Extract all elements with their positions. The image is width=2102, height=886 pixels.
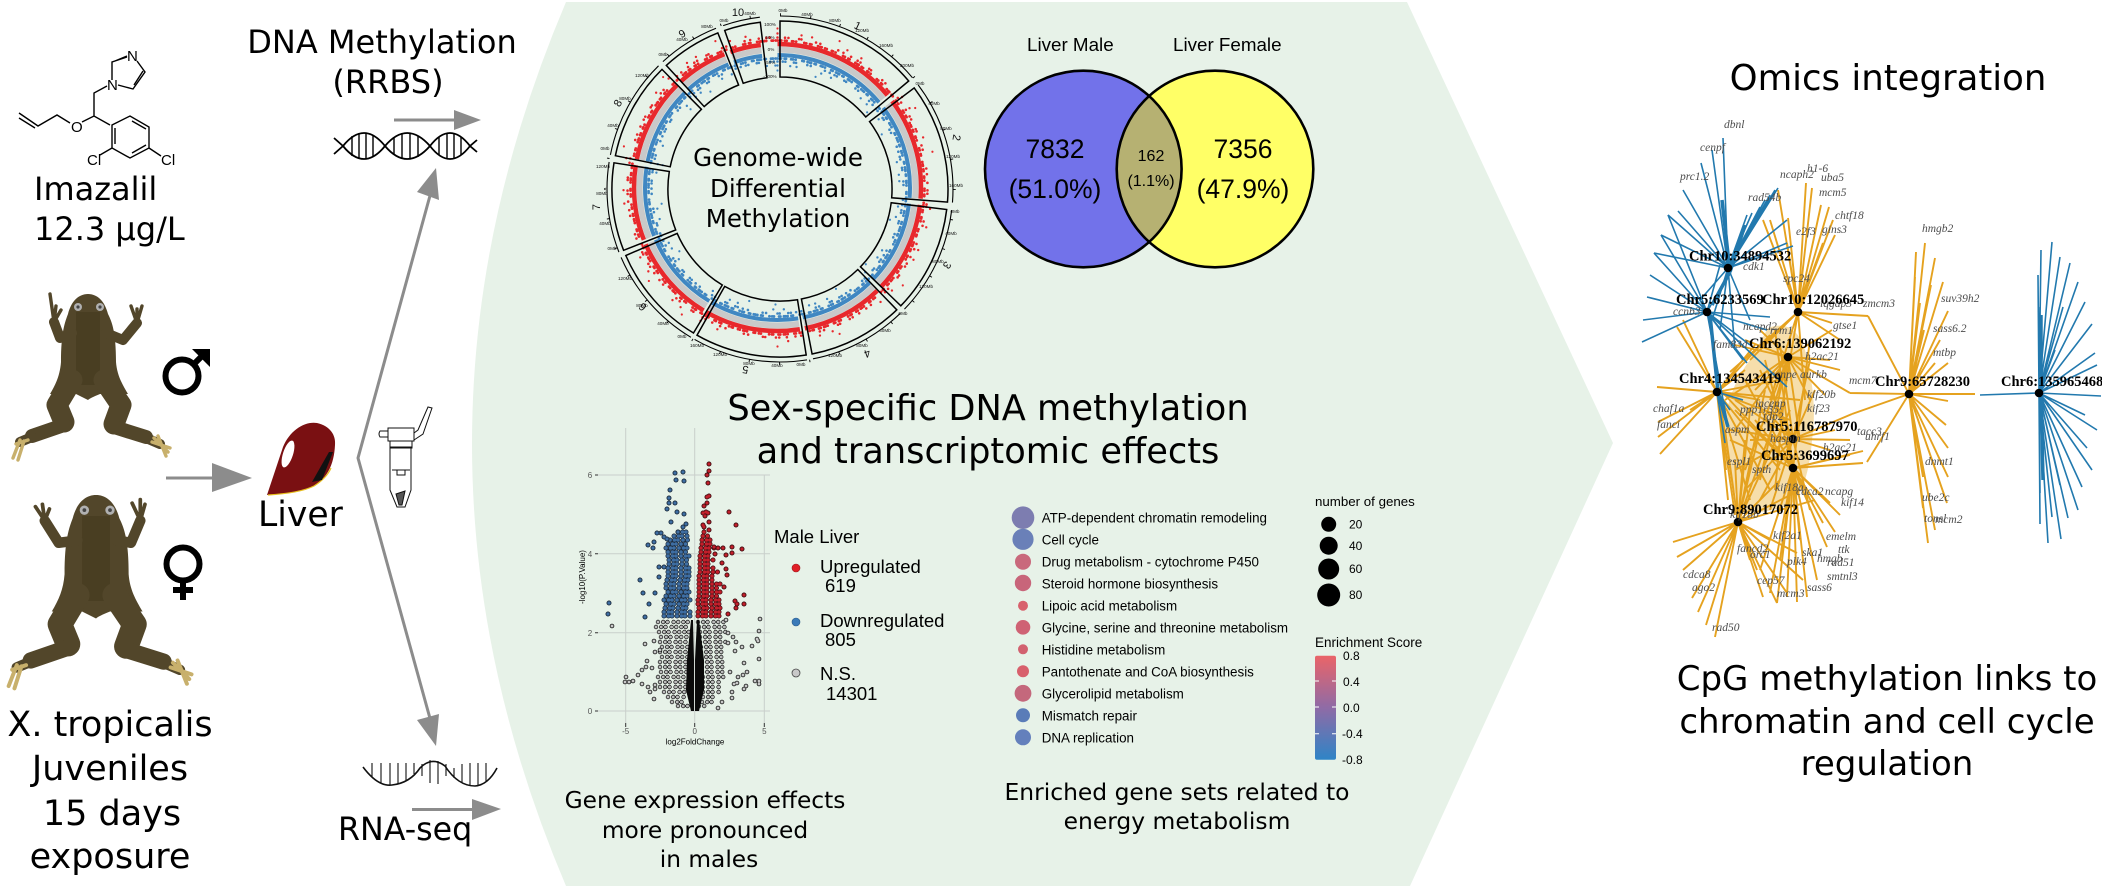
chart: CpG gene network: hmgb [1817, 553, 1843, 565]
chart: CpG gene network: Chr10:34894532 [1689, 249, 1791, 265]
text: RNA-seq label: RNA-seq [338, 812, 472, 848]
chart: circular genome-wide methylation plot: 5 [741, 363, 750, 375]
chart: CpG gene network: kif23 [1807, 403, 1830, 415]
chart: CpG gene network: cenpe [1770, 369, 1797, 381]
arrow: branching from liver to methylation and RNA-seq [358, 168, 439, 746]
chart: CpG gene network: haspin [1770, 433, 1801, 445]
chart: CpG gene network: Chr5:6233569 [1676, 292, 1764, 308]
icon: liver [267, 423, 335, 495]
chart: volcano plot male liver: 4 [588, 550, 593, 559]
legend: volcano plot: Downregulated [820, 610, 944, 631]
chart: circular genome-wide methylation plot: 10 [732, 7, 744, 19]
text: circular plot centre label: Genome-wide [693, 143, 863, 172]
chart: circular genome-wide methylation plot: 80Mb [596, 191, 608, 196]
chart: circular genome-wide methylation plot: 1 [852, 20, 863, 33]
chart: volcano plot male liver: 6 [588, 471, 593, 480]
chart: circular genome-wide methylation plot: 120Mb [919, 284, 933, 289]
icon: female symbol [166, 548, 200, 600]
chart: circular genome-wide methylation plot: 6 [637, 300, 649, 313]
chart: volcano plot male liver: 5 [762, 727, 767, 736]
legend: number of genes [1315, 494, 1415, 606]
icon: imazalil chemical structure: N [127, 48, 138, 65]
chart: circular genome-wide methylation plot: 120Mb [713, 352, 727, 357]
text: imazalil dose: 12.3 µg/L [34, 210, 185, 248]
icon: DNA double helix [334, 133, 477, 159]
legend: volcano plot: 14301 [826, 683, 877, 704]
chart: CpG gene network: h1-6 [1807, 163, 1828, 175]
icon: RNA strand [363, 760, 497, 786]
chart: CpG gene network: fam83d [1713, 339, 1748, 351]
chart: gene set enrichment bubble list: Glycine, serine and threonine metabolism [1042, 620, 1288, 636]
chart: CpG gene network: emelm [1826, 531, 1856, 543]
chart: gene set enrichment bubble list [1012, 506, 1288, 746]
chart: CpG gene network: sass6 [1807, 582, 1832, 594]
legend: enrichment score colour bar: -0.8 [1342, 753, 1363, 767]
chart: circular genome-wide methylation plot: 160Mb [879, 43, 893, 48]
chart: CpG gene network: cdca2 [1796, 486, 1824, 498]
chart: CpG gene network: gtse1 [1833, 320, 1857, 332]
chart: CpG gene network: Chr10:12026645 [1762, 292, 1864, 308]
chart: CpG gene network: cenpf [1700, 142, 1727, 154]
chart: circular genome-wide methylation plot: 9 [677, 28, 688, 41]
text: gene expression caption: Gene expression effects [565, 787, 845, 814]
chart: circular genome-wide methylation plot: 120Mb [635, 73, 649, 78]
chart: circular genome-wide methylation plot: 0Mb [608, 246, 617, 251]
text: gene expression caption: in males [660, 846, 758, 873]
chart: circular genome-wide methylation plot: 80Mb [856, 343, 868, 348]
chart: circular genome-wide methylation plot: 2 [950, 133, 962, 142]
text: liver label: Liver [258, 495, 344, 535]
chart: CpG gene network: ppp1r35 [1739, 404, 1779, 416]
chart: circular genome-wide methylation plot: 50% [765, 35, 775, 40]
heading: omics integration: Omics integration [1730, 58, 2046, 99]
chart: CpG gene network: rad51 [1827, 557, 1854, 569]
chart: gene set enrichment bubble list: Lipoic acid metabolism [1042, 598, 1177, 614]
chart: circular genome-wide methylation plot: 40Mb [771, 363, 783, 368]
chart: circular genome-wide methylation plot: 200Mb [900, 63, 914, 68]
icon: imazalil chemical structure: N [107, 77, 118, 94]
chart: CpG gene network: kif14 [1841, 497, 1864, 509]
chart: CpG gene network: kif18a [1775, 482, 1804, 494]
chart: Venn diagram male vs female [985, 34, 1313, 267]
legend: enrichment score colour bar: 0.8 [1343, 649, 1360, 663]
chart: circular genome-wide methylation plot: 7 [591, 204, 603, 210]
chart: CpG gene network: gins3 [1822, 224, 1847, 236]
chart: circular genome-wide methylation plot: 120Mb [618, 276, 632, 281]
chart: circular genome-wide methylation plot: 80Mb [932, 259, 944, 264]
chart: gene set enrichment bubble list: Steroid hormone biosynthesis [1042, 576, 1218, 592]
chart: CpG gene network: spc24 [1783, 273, 1810, 285]
chart: CpG gene network: ttk [1838, 544, 1850, 556]
legend: number of genes: number of genes [1315, 494, 1415, 509]
chart: CpG gene network: aurkb [1800, 369, 1827, 381]
text: imazalil dose: Imazalil [34, 170, 157, 208]
chart: Venn diagram male vs female: (1.1%) [1127, 173, 1175, 190]
chart: CpG gene network: Chr5:116787970 [1756, 419, 1858, 435]
legend: volcano plot: Male Liver [774, 526, 859, 547]
chart: CpG gene network: Chr5:3699697 [1761, 448, 1849, 464]
chart: CpG gene network: dnmt1 [1925, 456, 1954, 468]
chart: circular genome-wide methylation plot: 40Mb [676, 37, 688, 42]
icon: male frog [13, 294, 170, 460]
text: gene expression caption: more pronounced [602, 817, 808, 844]
chart: CpG gene network: Chr9:65728230 [1875, 374, 1970, 390]
chart: volcano plot male liver: 0 [588, 707, 593, 716]
chart: circular genome-wide methylation plot: 8 [612, 98, 625, 109]
chart: CpG gene network: prc1.2 [1679, 171, 1710, 183]
chart: Venn diagram male vs female: Liver Female [1173, 34, 1282, 55]
legend: enrichment score colour bar: 0.0 [1343, 701, 1360, 715]
chart: CpG gene network: h2ac21 [1805, 351, 1839, 363]
icon: imazalil chemical structure: Cl [161, 152, 175, 169]
legend: enrichment score colour bar [1315, 635, 1422, 767]
chart: circular genome-wide methylation plot: 0Mb [916, 81, 925, 86]
icon: female frog [9, 495, 192, 688]
chart: circular genome-wide methylation plot: 80Mb [701, 24, 713, 29]
chart: CpG gene network: Chr4:134543419 [1679, 371, 1781, 387]
icon: male symbol [166, 349, 210, 392]
icon: imazalil chemical structure [19, 48, 175, 169]
panel: central results arrow [472, 2, 1613, 886]
chart: volcano plot male liver: -log10(P.Value) [578, 550, 587, 604]
chart: gene set enrichment bubble list: ATP-dependent chromatin remodeling [1042, 510, 1267, 526]
chart: circular genome-wide methylation plot: 80Mb [940, 126, 952, 131]
legend: volcano plot: N.S. [820, 663, 856, 684]
chart: circular genome-wide methylation plot: 100% [764, 22, 776, 27]
text: species and exposure: X. tropicalis [7, 705, 213, 745]
text: enrichment caption: energy metabolism [1064, 807, 1290, 835]
chart: CpG gene network: kif2a1 [1773, 530, 1802, 542]
chart: CpG gene network: tonsl [1924, 513, 1946, 525]
chart: CpG gene network: smtnl3 [1827, 571, 1858, 583]
legend: enrichment score colour bar: -0.4 [1342, 727, 1363, 741]
legend: enrichment score colour bar: Enrichment Score [1315, 635, 1422, 650]
chart: CpG gene network: incenp [1755, 398, 1786, 410]
chart: CpG gene network: cep57 [1757, 575, 1786, 587]
chart: CpG gene network: mtbp [1933, 347, 1956, 359]
chart: CpG gene network: ska1 [1802, 547, 1823, 559]
legend: volcano plot [774, 526, 944, 704]
chart: Venn diagram male vs female: Liver Male [1027, 34, 1114, 55]
chart: circular genome-wide methylation plot: 0Mb [779, 8, 788, 13]
chart: CpG gene network: cdk1 [1743, 261, 1765, 273]
chart: gene set enrichment bubble list: Mismatch repair [1042, 708, 1137, 724]
chart: CpG gene network: mcm2 [1935, 514, 1963, 526]
chart: CpG gene network: cdca8 [1683, 569, 1711, 581]
chart: circular genome-wide methylation plot: 40Mb [607, 123, 619, 128]
chart: gene set enrichment bubble list: Histidine metabolism [1042, 642, 1165, 658]
chart: circular genome-wide methylation plot: 0Mb [678, 334, 687, 339]
chart: CpG gene network: plk4 [1786, 556, 1807, 568]
text: omics conclusion: regulation [1801, 744, 1973, 784]
chart: Venn diagram male vs female: (47.9%) [1197, 174, 1289, 204]
chart: CpG gene network: zmcm3 [1862, 298, 1895, 310]
chart: CpG gene network: chaf1a [1653, 403, 1685, 415]
chart: CpG gene network: ncapd2 [1743, 321, 1777, 333]
chart: circular genome-wide methylation plot: 0Mb [951, 209, 960, 214]
chart: CpG gene network: espl1 [1727, 456, 1751, 468]
chart: CpG gene network: uhrf1 [1865, 431, 1890, 443]
chart: circular genome-wide methylation plot: 120Mb [828, 353, 842, 358]
chart: CpG gene network: aspm [1725, 424, 1749, 436]
text: circular plot centre label: Methylation [706, 204, 850, 233]
chart: CpG gene network: fancd2 [1737, 543, 1769, 555]
chart: circular genome-wide methylation plot: 3 [940, 259, 953, 271]
chart: gene set enrichment bubble list: Glycerolipid metabolism [1042, 686, 1184, 702]
chart: CpG gene network: mcm3 [1777, 588, 1805, 600]
chart: circular genome-wide methylation plot: 0Mb [659, 52, 668, 57]
chart: CpG gene network: uba5 [1821, 172, 1844, 184]
chart: CpG gene network: ago2 [1692, 582, 1715, 594]
chart: circular genome-wide methylation plot: 40Mb [599, 221, 611, 226]
chart: circular genome-wide methylation plot: 4 [862, 346, 872, 360]
arrow: to RNA-seq results [412, 799, 501, 820]
icon: sample tube [379, 407, 432, 507]
chart: CpG gene network: mcm5 [1819, 187, 1847, 199]
legend: volcano plot: 805 [825, 629, 856, 650]
chart: Venn diagram male vs female: 7356 [1214, 134, 1272, 164]
chart: gene set enrichment bubble list: Pantothenate and CoA biosynthesis [1042, 664, 1254, 680]
icon: imazalil chemical structure: Cl [87, 152, 101, 169]
chart: circular genome-wide methylation plot: 40Mb [879, 328, 891, 333]
arrow: frogs to liver [166, 463, 252, 492]
legend: number of genes: 80 [1349, 588, 1363, 602]
chart: CpG gene network: suv39h2 [1941, 293, 1980, 305]
chart: CpG gene network: ncapg [1825, 486, 1853, 498]
chart: volcano plot male liver: 0 [692, 727, 697, 736]
chart: circular genome-wide methylation plot [591, 7, 963, 375]
text: species and exposure: exposure [30, 837, 190, 877]
chart: CpG gene network: chtf18 [1835, 210, 1864, 222]
chart: circular genome-wide methylation plot: 80Mb [829, 18, 841, 23]
chart: circular genome-wide methylation plot: 40Mb [945, 231, 957, 236]
text: DNA methylation heading: DNA Methylation [247, 23, 517, 61]
chart: circular genome-wide methylation plot: 40Mb [744, 11, 756, 16]
icon: imazalil chemical structure: O [71, 119, 83, 136]
chart: CpG gene network: e2f3 [1796, 226, 1816, 238]
text: omics conclusion: CpG methylation links to [1677, 659, 2097, 699]
text: enrichment caption: Enriched gene sets related to [1004, 778, 1350, 806]
text: omics conclusion: chromatin and cell cycle [1679, 702, 2095, 742]
chart: circular genome-wide methylation plot: -50% [765, 60, 775, 65]
chart: CpG gene network: rad50 [1712, 622, 1740, 634]
chart: CpG gene network: rad54b [1748, 192, 1781, 204]
chart: circular genome-wide methylation plot: 160Mb [690, 343, 704, 348]
heading: central panel title: Sex-specific DNA methylation [727, 388, 1249, 429]
chart: CpG gene network: Chr6:139062192 [1749, 336, 1851, 352]
legend: number of genes: 40 [1349, 539, 1363, 553]
chart: volcano plot male liver [578, 428, 770, 746]
chart: CpG gene network: Chr9:89017072 [1703, 502, 1798, 518]
text: DNA methylation heading: (RRBS) [332, 63, 444, 101]
chart: CpG gene network: Chr6:135965468 [2001, 374, 2102, 390]
text: circular plot centre label: Differential [710, 174, 846, 203]
chart: volcano plot male liver: 2 [588, 629, 593, 638]
chart: CpG gene network: mcm7 [1849, 375, 1878, 387]
chart: Venn diagram male vs female: 7832 [1026, 134, 1084, 164]
chart: gene set enrichment bubble list: Cell cycle [1042, 532, 1099, 548]
chart: CpG gene network: iqgap3 [1820, 298, 1852, 310]
chart: circular genome-wide methylation plot: 160Mb [949, 183, 963, 188]
chart: CpG gene network: hmgb2 [1922, 223, 1954, 235]
chart: circular genome-wide methylation plot: 80Mb [636, 303, 648, 308]
chart: circular genome-wide methylation plot: 0Mb [899, 311, 908, 316]
chart: gene set enrichment bubble list: DNA replication [1042, 730, 1134, 746]
chart: volcano plot male liver: -5 [622, 727, 630, 736]
chart: circular genome-wide methylation plot: 120Mb [855, 28, 869, 33]
chart: circular genome-wide methylation plot: 120Mb [596, 164, 610, 169]
chart: circular genome-wide methylation plot: 0Mb [720, 18, 729, 23]
text: species and exposure: Juveniles [30, 749, 188, 789]
legend: enrichment score colour bar: 0.4 [1343, 675, 1360, 689]
chart: circular genome-wide methylation plot: 80Mb [743, 361, 755, 366]
chart: circular genome-wide methylation plot: 0Mb [797, 362, 806, 367]
arrow: to DNA methylation panel [394, 110, 481, 130]
chart: circular genome-wide methylation plot: -100% [763, 74, 777, 79]
chart: gene set enrichment bubble list: Drug metabolism - cytochrome P450 [1042, 554, 1259, 570]
legend: volcano plot: 619 [825, 575, 856, 596]
chart: circular genome-wide methylation plot: 0% [768, 47, 774, 52]
text: species and exposure: 15 days [43, 794, 181, 834]
legend: number of genes: 20 [1349, 518, 1363, 532]
chart: CpG gene network: spth [1752, 464, 1771, 476]
chart: CpG gene network: tacc3 [1857, 426, 1882, 438]
chart: circular genome-wide methylation plot: 80Mb [619, 96, 631, 101]
chart: CpG gene network [1642, 119, 2102, 637]
chart: CpG gene network: sass6.2 [1933, 323, 1967, 335]
chart: CpG gene network: ncaph2 [1780, 169, 1814, 181]
legend: number of genes: 60 [1349, 562, 1363, 576]
chart: CpG gene network: tdp2 [1763, 411, 1784, 423]
chart: CpG gene network: rrm1 [1770, 325, 1793, 337]
chart: circular genome-wide methylation plot: 40Mb [801, 12, 813, 17]
chart: CpG gene network: dbnl [1724, 119, 1744, 131]
chart: circular genome-wide methylation plot: 40Mb [657, 321, 669, 326]
chart: circular genome-wide methylation plot: 40Mb [928, 101, 940, 106]
chart: CpG gene network: kif18b [1730, 509, 1759, 521]
chart: volcano plot male liver: log2FoldChange [666, 738, 725, 746]
legend: volcano plot: Upregulated [820, 556, 921, 577]
chart: CpG gene network: ube2c [1922, 492, 1949, 504]
chart: CpG gene network: kif20b [1807, 389, 1836, 401]
chart: Venn diagram male vs female: (51.0%) [1009, 174, 1101, 204]
chart: CpG gene network: fanci [1657, 419, 1680, 431]
chart: CpG gene network: ccnb3 [1673, 306, 1701, 318]
chart: CpG gene network: h2ac21 [1823, 442, 1857, 454]
chart: CpG gene network: orc1 [1750, 549, 1771, 561]
chart: circular genome-wide methylation plot: 120Mb [946, 154, 960, 159]
heading: central panel title: and transcriptomic effects [757, 431, 1219, 472]
chart: Venn diagram male vs female: 162 [1138, 148, 1164, 165]
chart: circular genome-wide methylation plot: 0Mb [601, 146, 610, 151]
